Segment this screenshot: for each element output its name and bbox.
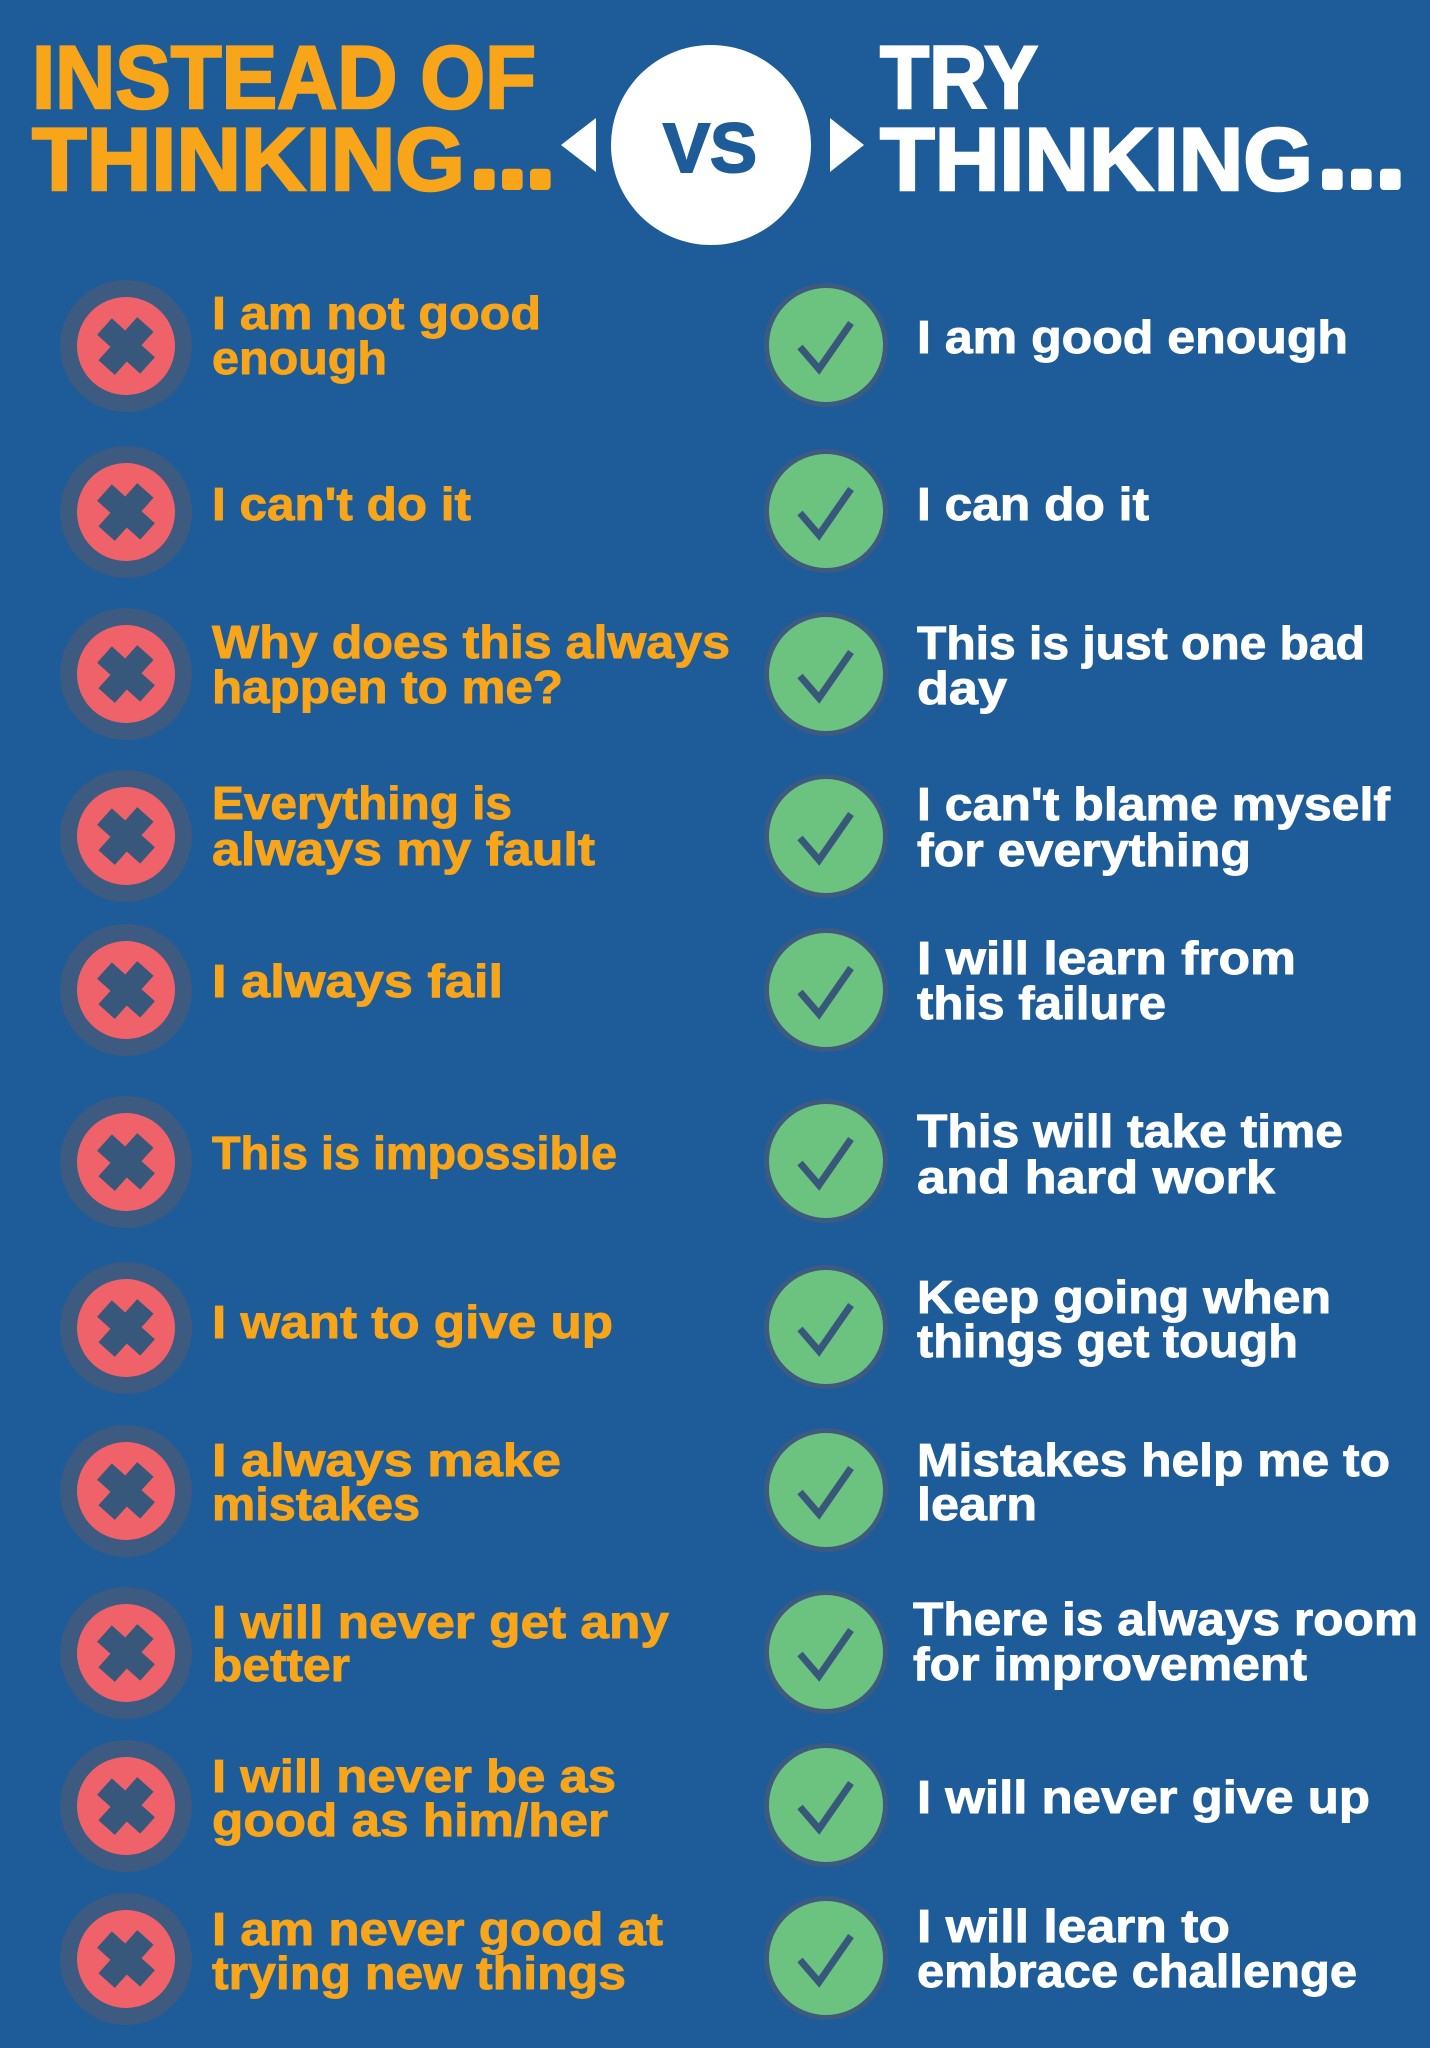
text: positive 9: for improvement (913, 1638, 1307, 1690)
row 2 negative (60, 446, 192, 578)
text: negative 3: happen to me? (212, 661, 563, 713)
heading: try thinking: THINKING (880, 109, 1313, 209)
row 7 negative (60, 1262, 192, 1394)
text: negative 1 (212, 287, 541, 384)
heading: try thinking (880, 27, 1403, 209)
text: negative 9: I will never get any (212, 1596, 669, 1648)
heading: try thinking: TRY (880, 27, 1038, 127)
text: positive 8: learn (917, 1478, 1037, 1530)
row 8 positive (764, 1428, 888, 1552)
text: positive 6 (917, 1105, 1343, 1203)
text: positive 2: I can do it (917, 478, 1149, 530)
text: positive 5: this failure (917, 977, 1166, 1029)
row 1 positive (764, 283, 888, 407)
text: positive 10: I will never give up (917, 1771, 1370, 1823)
text: negative 10: good as him/her (212, 1794, 608, 1846)
text: positive 4: I can't blame myself (917, 778, 1391, 830)
row 6 negative (60, 1096, 192, 1228)
row 9 positive (764, 1590, 888, 1714)
row 1 negative (60, 280, 192, 412)
text: negative 1: I am not good (212, 287, 541, 339)
arrow: right (830, 118, 864, 172)
text: negative 2: I can't do it (212, 478, 471, 530)
heading: instead of thinking: ... (472, 105, 553, 205)
text: negative 4: Everything is (212, 777, 512, 829)
text: positive 7 (917, 1271, 1331, 1367)
row 4 negative (60, 770, 192, 902)
row 10 negative (60, 1740, 192, 1872)
row 3 positive (764, 612, 888, 736)
text: negative 3 (212, 616, 730, 713)
text: negative 4 (212, 777, 595, 875)
text: negative 11: I am never good at (212, 1903, 663, 1955)
text: negative 10: I will never be as (212, 1750, 616, 1802)
text: positive 9: There is always room (913, 1593, 1418, 1645)
row 5 positive (764, 928, 888, 1052)
text: negative 8: mistakes (212, 1478, 420, 1530)
heading: instead of thinking: INSTEAD OF (32, 27, 536, 127)
heading: instead of thinking: THINKING (32, 109, 465, 209)
text: positive 7: things get tough (917, 1315, 1298, 1367)
VS badge (611, 45, 811, 245)
text: positive 8: Mistakes help me to (917, 1434, 1390, 1486)
row 2 positive (764, 449, 888, 573)
text: negative 9: better (212, 1639, 350, 1691)
row 11 positive (764, 1896, 888, 2020)
text: positive 6: This will take time (917, 1105, 1343, 1157)
row 6 positive (764, 1099, 888, 1223)
row 10 positive (764, 1743, 888, 1867)
row 4 positive (764, 774, 888, 898)
text: positive 5 (917, 932, 1296, 1029)
text: negative 6: This is impossible (212, 1127, 617, 1179)
text: negative 8 (212, 1434, 561, 1530)
text: positive 11: I will learn to (917, 1900, 1230, 1952)
text: positive 9 (913, 1593, 1418, 1690)
text: negative 1: enough (212, 332, 387, 384)
text: positive 11: embrace challenge (917, 1945, 1357, 1997)
row 5 negative (60, 924, 192, 1056)
text: negative 10 (212, 1750, 616, 1846)
text: positive 4 (917, 778, 1391, 876)
row 8 negative (60, 1425, 192, 1557)
text: positive 3 (917, 617, 1365, 714)
text: positive 5: I will learn from (917, 932, 1296, 984)
row 9 negative (60, 1587, 192, 1719)
row 3 negative (60, 608, 192, 740)
row 11 negative (60, 1893, 192, 2025)
text: negative 4: always my fault (212, 823, 595, 875)
text: positive 11 (917, 1900, 1357, 1997)
heading: try thinking: ... (1320, 105, 1403, 205)
text: positive 3: day (917, 662, 1007, 714)
text: negative 7: I want to give up (212, 1296, 613, 1348)
row 7 positive (764, 1265, 888, 1389)
VS badge: VS (663, 109, 757, 187)
heading: instead of thinking (32, 27, 553, 209)
text: positive 3: This is just one bad (917, 617, 1365, 669)
arrow: left (561, 118, 596, 172)
text: negative 8: I always make (212, 1434, 561, 1486)
text: negative 11 (212, 1903, 663, 1999)
text: negative 5: I always fail (212, 955, 503, 1007)
text: positive 8 (917, 1434, 1390, 1530)
text: negative 3: Why does this always (212, 616, 730, 668)
text: negative 9 (212, 1596, 669, 1691)
text: positive 7: Keep going when (917, 1271, 1331, 1323)
text: positive 1: I am good enough (917, 311, 1348, 363)
text: positive 6: and hard work (917, 1151, 1275, 1203)
text: negative 11: trying new things (212, 1947, 626, 1999)
text: positive 4: for everything (917, 824, 1251, 876)
